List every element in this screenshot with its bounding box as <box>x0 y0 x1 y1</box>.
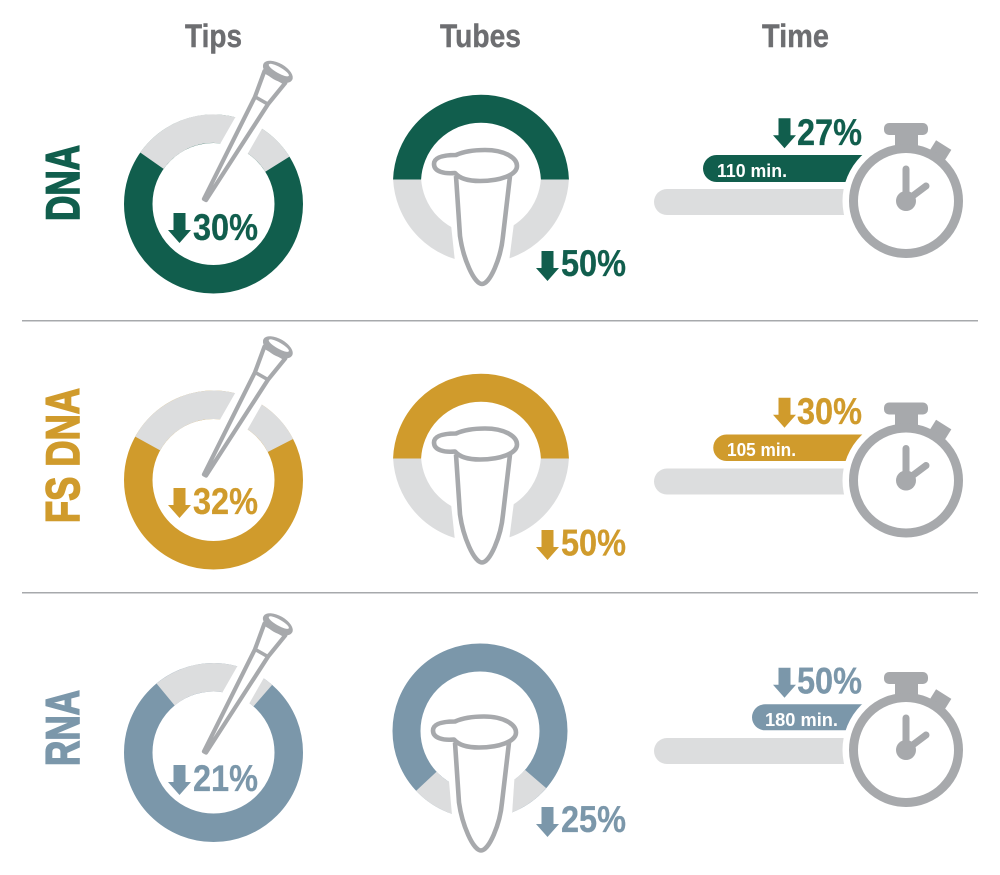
value: 50%: 50% <box>797 660 862 702</box>
icon: down arrow <box>536 530 559 560</box>
bar: 180 min <box>752 704 870 730</box>
icon: down arrow <box>168 765 191 795</box>
value: 50%: 50% <box>561 243 626 284</box>
panel: DNA time <box>654 112 970 264</box>
icon: down arrow <box>773 668 796 698</box>
icon: down arrow <box>773 118 796 148</box>
bar: reference time <box>654 468 850 494</box>
value: 30%: 30% <box>193 207 258 248</box>
icon: down arrow <box>168 488 191 518</box>
panel: DNA tubes ring <box>407 101 626 300</box>
panel: DNA tips donut <box>138 56 296 279</box>
bar label: 180 min.: 180 min. <box>765 709 838 730</box>
row label: FS DNA: FS DNA <box>36 388 89 523</box>
icon: stopwatch <box>854 402 958 533</box>
panel: FS DNA tips donut <box>138 332 296 555</box>
icon: pipette tip <box>191 56 296 208</box>
icon: microcentrifuge tube <box>434 150 517 284</box>
icon: pipette tip <box>191 609 296 760</box>
bar: 105 min <box>713 434 870 461</box>
icon: down arrow <box>536 251 559 281</box>
bar label: 110 min.: 110 min. <box>717 160 787 181</box>
row label: RNA: RNA <box>36 690 89 766</box>
value: 21%: 21% <box>193 758 258 799</box>
column heading: Tubes: Tubes <box>440 18 521 54</box>
icon: stopwatch <box>854 672 958 802</box>
panel: FS DNA tubes ring <box>407 380 626 579</box>
icon: down arrow <box>536 807 559 837</box>
bar label: 105 min.: 105 min. <box>727 439 796 460</box>
panel: RNA tips donut <box>138 609 296 828</box>
icon: stopwatch <box>854 123 958 254</box>
column heading: Time: Time <box>762 18 829 54</box>
icon: microcentrifuge tube <box>434 428 517 562</box>
value: 27%: 27% <box>797 112 862 153</box>
icon: down arrow <box>168 213 191 243</box>
value: 30%: 30% <box>797 391 862 432</box>
icon: microcentrifuge tube <box>433 716 516 850</box>
panel: RNA tubes ring <box>406 658 626 860</box>
bar: 110 min <box>703 155 870 182</box>
value: 25%: 25% <box>561 799 626 840</box>
value: 50%: 50% <box>561 522 626 564</box>
row label: DNA: DNA <box>36 145 89 221</box>
icon: pipette tip <box>191 332 296 483</box>
icon: down arrow <box>773 398 796 428</box>
value: 32%: 32% <box>193 481 258 522</box>
panel: RNA time <box>654 660 970 814</box>
bar: reference time <box>654 189 850 215</box>
bar: reference time <box>654 738 850 764</box>
column heading: Tips: Tips <box>185 18 242 54</box>
panel: FS DNA time <box>654 391 970 544</box>
